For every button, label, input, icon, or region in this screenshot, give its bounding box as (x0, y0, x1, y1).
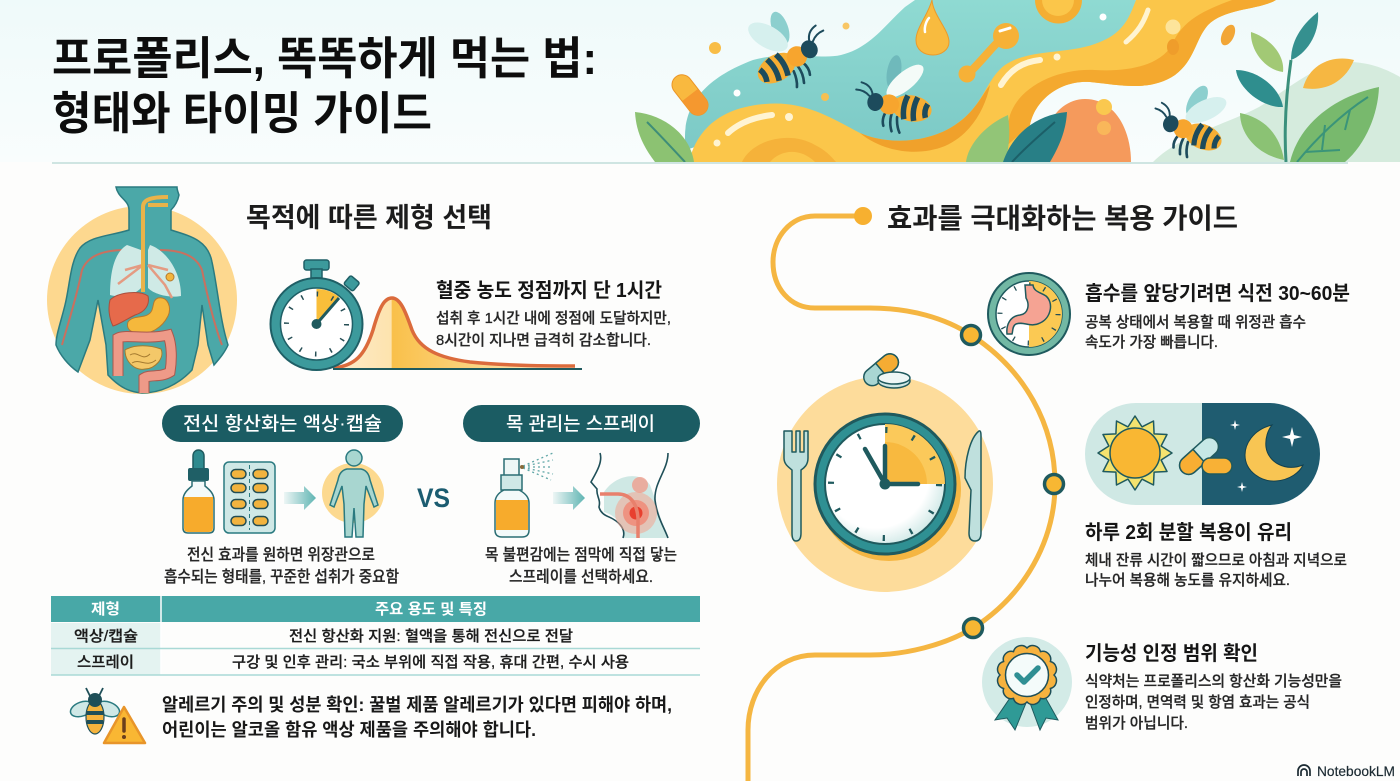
heading pill: throat spray (463, 405, 700, 442)
header illustration: honey, bees and leaves (635, 0, 1400, 167)
text: approved function scope (1085, 642, 1342, 732)
caption (164, 546, 399, 586)
allergy warning text: 어린이는 알코올 함유 액상 제품을 주의해야 합니다. (162, 720, 536, 740)
step 2: twice a day (1085, 403, 1347, 589)
header background (0, 0, 1400, 162)
heading: form selection: 목적에 따른 제형 선택 (246, 203, 492, 233)
text: approved function scope: 기능성 인정 범위 확인 (1085, 642, 1258, 665)
icon: human body with digestive organs (47, 187, 237, 394)
VS label: VS (417, 483, 450, 513)
comparison table: 전신 항산화 지원: 혈액을 통해 전신으로 전달 (289, 628, 573, 645)
text: before meal: 속도가 가장 빠릅니다. (1085, 334, 1218, 351)
step 3: approved function scope (982, 637, 1342, 732)
icon: dropper bottle (183, 450, 214, 533)
panel: systemic antioxidant (162, 405, 403, 586)
allergy warning text: 알레르기 주의 및 성분 확인: 꿀벌 제품 알레르기가 있다면 피해야 하며, (162, 695, 672, 715)
title: 프로폴리스, 똑똑하게 먹는 법: (52, 33, 597, 84)
comparison table: 제형 (91, 601, 120, 618)
step 1: before meal (988, 273, 1350, 355)
text: approved function scope: 식약처는 프로폴리스의 항산화 기능성만을 (1085, 673, 1342, 690)
comparison table: 스프레이 (77, 654, 134, 671)
chart: stopwatch with blood concentration curve (270, 260, 582, 370)
text block: peak blood concentration: 혈중 농도 정점까지 단 1시간 (436, 279, 662, 302)
text block: peak blood concentration: 8시간이 지나면 급격히 감소합니다. (436, 332, 651, 349)
bee 3 (1143, 82, 1230, 167)
caption: 흡수되는 형태를, 꾸준한 섭취가 중요함 (164, 568, 399, 586)
icon: bee with warning triangle (68, 688, 145, 743)
comparison table: 주요 용도 및 특징 (375, 601, 487, 618)
heading pill: liquid and capsule (162, 405, 403, 442)
text: before meal (1085, 282, 1350, 351)
caption: 스프레이를 선택하세요. (509, 568, 653, 586)
icon: capsule blister pack (224, 462, 275, 533)
text: twice a day (1085, 521, 1347, 589)
caption (485, 546, 677, 586)
text: twice a day: 나누어 복용해 농도를 유지하세요. (1085, 572, 1290, 589)
title: 형태와 타이밍 가이드 (52, 88, 432, 139)
arrow (553, 486, 585, 510)
icon: stomach clock (988, 273, 1070, 355)
icon: day and night capsule (1085, 403, 1320, 505)
panel: throat care spray (463, 405, 700, 586)
comparison table: 액상/캡슐 (74, 628, 138, 645)
arrow (284, 486, 316, 510)
icon: throat with irritation (591, 453, 668, 538)
allergy warning text (162, 695, 672, 740)
text: before meal: 흡수를 앞당기려면 식전 30~60분 (1085, 282, 1350, 305)
text: approved function scope: 범위가 아닙니다. (1085, 715, 1188, 732)
bee 1 (743, 9, 841, 101)
title (52, 33, 597, 139)
comparison table (51, 596, 700, 675)
heading pill: throat spray: 목 관리는 스프레이 (506, 413, 655, 435)
text: before meal: 공복 상태에서 복용할 때 위정관 흡수 (1085, 314, 1306, 331)
caption: 목 불편감에는 점막에 직접 닿는 (485, 546, 677, 564)
timeline path (748, 207, 1064, 781)
text block: peak blood concentration: 섭취 후 1시간 내에 정점에 도달하지만, (436, 310, 671, 327)
text: approved function scope: 인정하며, 면역력 및 항염 효과는 공식 (1085, 694, 1310, 711)
text: twice a day: 체내 잔류 시간이 짧으므로 아침과 지녁으로 (1085, 552, 1347, 569)
icon: human figure (322, 450, 384, 537)
icon: plate clock with fork and knife (777, 350, 993, 592)
comparison table: 구강 및 인후 관리: 국소 부위에 직접 작용, 휴대 간편, 수시 사용 (232, 654, 629, 671)
text: twice a day: 하루 2회 분할 복용이 유리 (1085, 521, 1292, 544)
heading: dosage guide: 효과를 극대화하는 복용 가이드 (887, 203, 1238, 234)
NotebookLM logo: NotebookLM (1317, 763, 1395, 779)
icon: approval rosette (982, 637, 1072, 730)
caption: 전신 효과를 원하면 위장관으로 (187, 546, 375, 564)
text block: peak blood concentration (436, 279, 671, 349)
heading pill: liquid and capsule: 전신 항산화는 액상·캡슐 (183, 413, 382, 435)
icon: spray bottle (495, 453, 553, 537)
bee 2 (850, 54, 934, 138)
